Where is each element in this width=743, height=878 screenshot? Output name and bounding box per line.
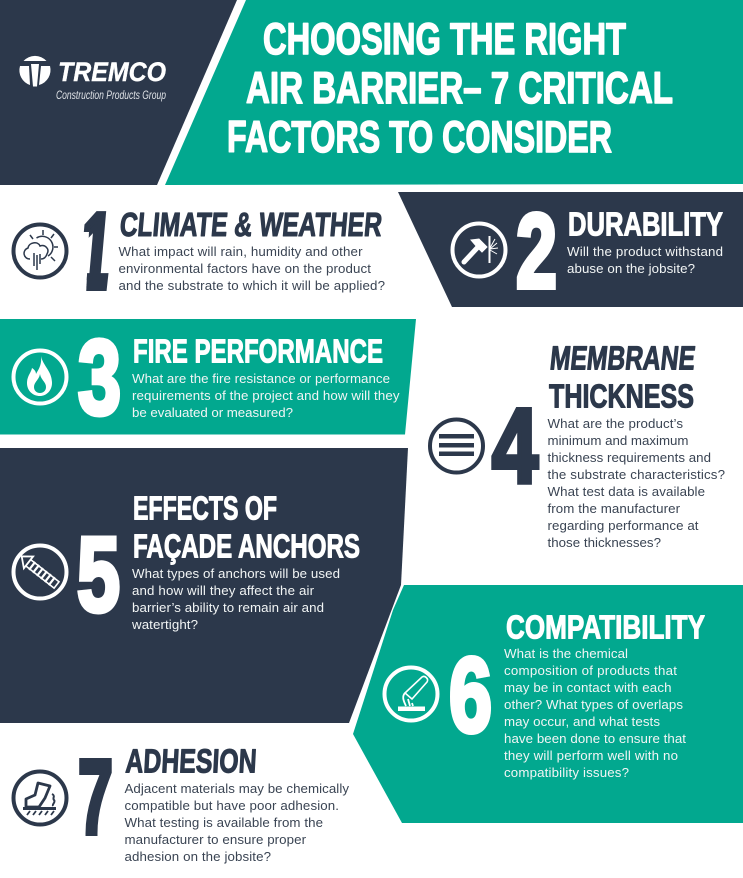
text block: and the substrate to which it will be applied? [118, 278, 385, 293]
number 4: 4 [492, 388, 538, 506]
icon: screw [14, 546, 66, 598]
heading: THICKNESS [549, 378, 694, 416]
heading [133, 490, 360, 566]
panel background [0, 319, 416, 434]
text block: may occur, and what tests [504, 714, 660, 729]
text block [124, 781, 349, 864]
logo: Tremco [19, 56, 166, 102]
text block [548, 416, 725, 550]
text block: the substrate characteristics? [548, 467, 725, 482]
text block [567, 244, 723, 276]
panel: 5 façade anchors [0, 448, 408, 723]
heading: FAÇADE ANCHORS [133, 528, 360, 566]
panel: 1 climate and weather [12, 211, 384, 292]
heading [548, 341, 697, 416]
text block: composition of products that [504, 663, 677, 678]
text block: environmental factors have on the product [118, 261, 371, 276]
heading: FIRE PERFORMANCE [133, 334, 383, 370]
text block [132, 371, 400, 420]
text block: regarding performance at [548, 518, 699, 533]
header panel [0, 0, 743, 185]
text block: compatible but have poor adhesion. [124, 798, 339, 813]
text block: What are the product’s [548, 416, 683, 431]
text block: Adjacent materials may be chemically [124, 781, 349, 796]
text block [118, 244, 385, 293]
panel background [398, 192, 743, 307]
title panel background [165, 0, 743, 185]
text block: those thicknesses? [548, 535, 661, 550]
panel background [0, 448, 408, 723]
text block: What types of anchors will be used [132, 566, 340, 581]
panel: 6 compatibility [353, 585, 743, 823]
panel: 2 durability [398, 192, 743, 310]
text block: manufacturer to ensure proper [124, 832, 307, 847]
panel: 4 membrane thickness [430, 341, 725, 550]
number 3: 3 [78, 319, 121, 437]
panel background [353, 585, 743, 823]
text block: minimum and maximum [548, 433, 688, 448]
panel: 3 fire performance [0, 319, 416, 437]
title: CHOOSING THE RIGHT [263, 15, 626, 64]
text block: adhesion on the jobsite? [124, 849, 271, 864]
text block: Will the product withstand [567, 244, 723, 259]
text block: What is the chemical [504, 646, 628, 661]
heading: CLIMATE & WEATHER [118, 207, 384, 244]
heading: EFFECTS OF [133, 490, 277, 528]
icon: weather [14, 224, 66, 278]
text block: What impact will rain, humidity and other [118, 244, 363, 259]
icon: hammer [452, 224, 506, 276]
number 7: 7 [78, 738, 113, 856]
icon: flame [14, 350, 66, 404]
text block: have been done to ensure that [504, 731, 686, 746]
title [227, 15, 673, 162]
icon: applicator [384, 668, 438, 720]
logo: Tremco: Construction Products Group [56, 90, 166, 102]
number 1: 1 [75, 192, 116, 310]
number 6: 6 [449, 636, 492, 754]
text block: be evaluated or measured? [132, 405, 293, 420]
text block: and how will they affect the air [132, 583, 315, 598]
text block: What testing is available from the [124, 815, 323, 830]
text block [131, 566, 340, 632]
text block: What test data is available [548, 484, 705, 499]
text block: may be in contact with each [504, 680, 672, 695]
logo panel [0, 0, 237, 185]
text block: they will perform well with no [504, 748, 678, 763]
icon: peeling membrane [14, 772, 66, 824]
text block: What are the fire resistance or performance [132, 371, 390, 386]
number 5: 5 [77, 516, 120, 634]
text block: from the manufacturer [548, 501, 681, 516]
text block: barrier’s ability to remain air and [132, 600, 324, 615]
panel: 7 adhesion [14, 738, 349, 864]
text block: requirements of the project and how will they [132, 388, 400, 403]
heading: ADHESION [125, 744, 258, 780]
text block: compatibility issues? [504, 765, 629, 780]
text block: abuse on the jobsite? [567, 261, 695, 276]
text block: thickness requirements and [548, 450, 711, 465]
text block: other? What types of overlaps [504, 697, 683, 712]
icon: layers [430, 420, 483, 472]
logo: Tremco: TREMCO [58, 57, 166, 87]
text block [504, 646, 686, 780]
number 2: 2 [516, 192, 557, 310]
text block: watertight? [131, 617, 198, 632]
icon: T mark [19, 56, 51, 86]
